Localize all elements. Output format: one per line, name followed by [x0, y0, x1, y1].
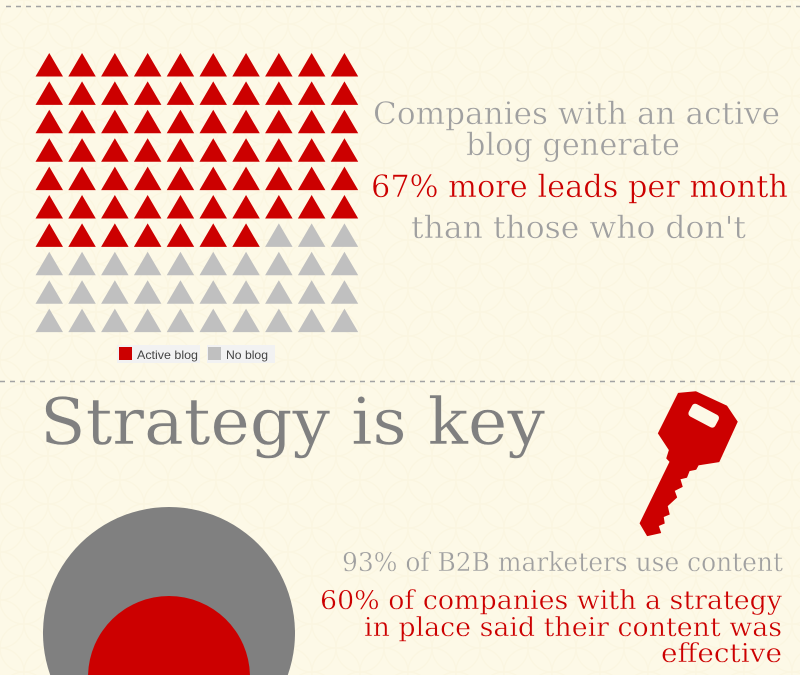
text block: B2B content statistic: 60% of companies with a strategy: [320, 586, 782, 616]
text block: blog leads statistic: than those who don't: [411, 210, 747, 246]
chart: nested circles: [43, 507, 295, 675]
text block: blog leads statistic: Companies with an active: [373, 96, 780, 132]
text block: blog leads statistic: 67% more leads per month: [371, 169, 788, 205]
text block: blog leads statistic: blog generate: [466, 127, 680, 163]
chart legend: Active blog: [137, 348, 198, 362]
text block: B2B content statistic: effective: [661, 639, 782, 669]
chart legend: No blog: [226, 348, 268, 362]
icon: red key: [640, 392, 737, 536]
pictogram chart: 67 of 100 triangles: [36, 53, 358, 332]
text block: blog leads statistic: [371, 96, 788, 246]
chart legend: [117, 345, 275, 363]
text block: B2B content statistic: in place said their content was: [364, 613, 782, 643]
text block: B2B content statistic: [320, 548, 784, 669]
text block: B2B content statistic: 93% of B2B marketers use content: [342, 548, 784, 578]
heading: Strategy is key: Strategy is key: [40, 385, 545, 460]
